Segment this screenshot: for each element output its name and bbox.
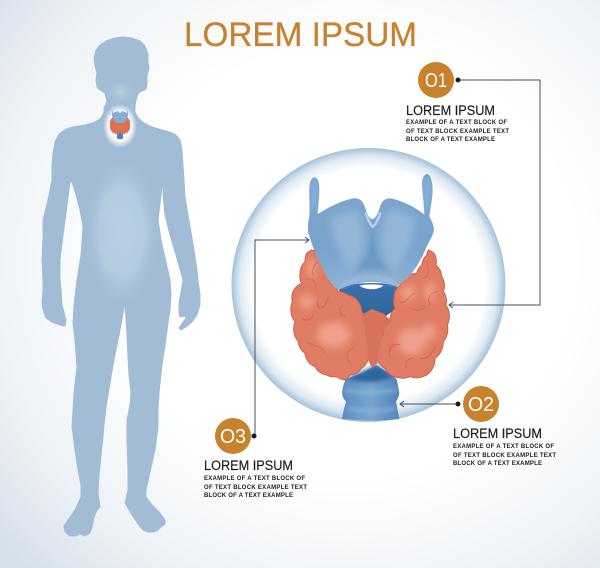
badge 01: O1 — [425, 70, 447, 92]
connector dot 01 — [456, 78, 460, 82]
trachea — [342, 365, 399, 421]
badge 03: O3 — [220, 426, 246, 448]
connector 01 — [449, 80, 540, 308]
lobe highlights — [299, 259, 435, 355]
connector 02 — [400, 401, 458, 407]
mini trachea — [117, 131, 123, 139]
cartilage shading — [314, 180, 427, 287]
text block 02 — [453, 426, 556, 467]
badge 02 — [463, 386, 499, 422]
face highlight — [104, 78, 138, 106]
thyroid illustration — [291, 174, 449, 421]
body highlight — [84, 156, 160, 308]
right lobe — [377, 250, 449, 378]
connector dot 02 — [456, 402, 460, 406]
text block 02: OF TEXT BLOCK EXAMPLE TEXT — [453, 453, 556, 459]
text block 01: LOREM IPSUM — [406, 103, 495, 118]
mini larynx — [112, 110, 128, 123]
text block 03: BLOCK OF A TEXT EXAMPLE — [204, 493, 293, 499]
text block 01 — [406, 103, 509, 143]
glow — [103, 104, 137, 148]
left lobe — [291, 250, 371, 380]
connector 03 — [255, 237, 309, 437]
badge 03 — [215, 418, 251, 454]
text block 01: BLOCK OF A TEXT EXAMPLE — [406, 137, 495, 143]
small thyroid in neck — [103, 104, 137, 148]
text block 01: EXAMPLE OF A TEXT BLOCK OF — [406, 120, 507, 126]
text block 02: EXAMPLE OF A TEXT BLOCK OF — [453, 444, 554, 450]
connector dot 03 — [252, 434, 256, 438]
badge 01 — [418, 62, 454, 98]
human body silhouette — [42, 37, 200, 536]
text block 03: EXAMPLE OF A TEXT BLOCK OF — [204, 476, 305, 482]
thyroid cartilage — [308, 174, 434, 290]
text block 03: LOREM IPSUM — [204, 458, 293, 473]
text block 02: LOREM IPSUM — [453, 426, 542, 441]
inner dark airway — [337, 283, 397, 317]
magnifier circle — [232, 148, 506, 422]
text block 02: BLOCK OF A TEXT EXAMPLE — [453, 461, 542, 467]
text block 03: OF TEXT BLOCK EXAMPLE TEXT — [204, 485, 307, 491]
isthmus — [362, 309, 391, 368]
text block 01: OF TEXT BLOCK EXAMPLE TEXT — [406, 129, 509, 135]
title: LOREM IPSUM — [184, 16, 417, 54]
mini lobes — [110, 117, 130, 134]
lobe lobules — [302, 262, 438, 368]
badge 02: O2 — [468, 394, 494, 416]
white gap — [359, 284, 383, 289]
text block 03 — [204, 458, 307, 499]
